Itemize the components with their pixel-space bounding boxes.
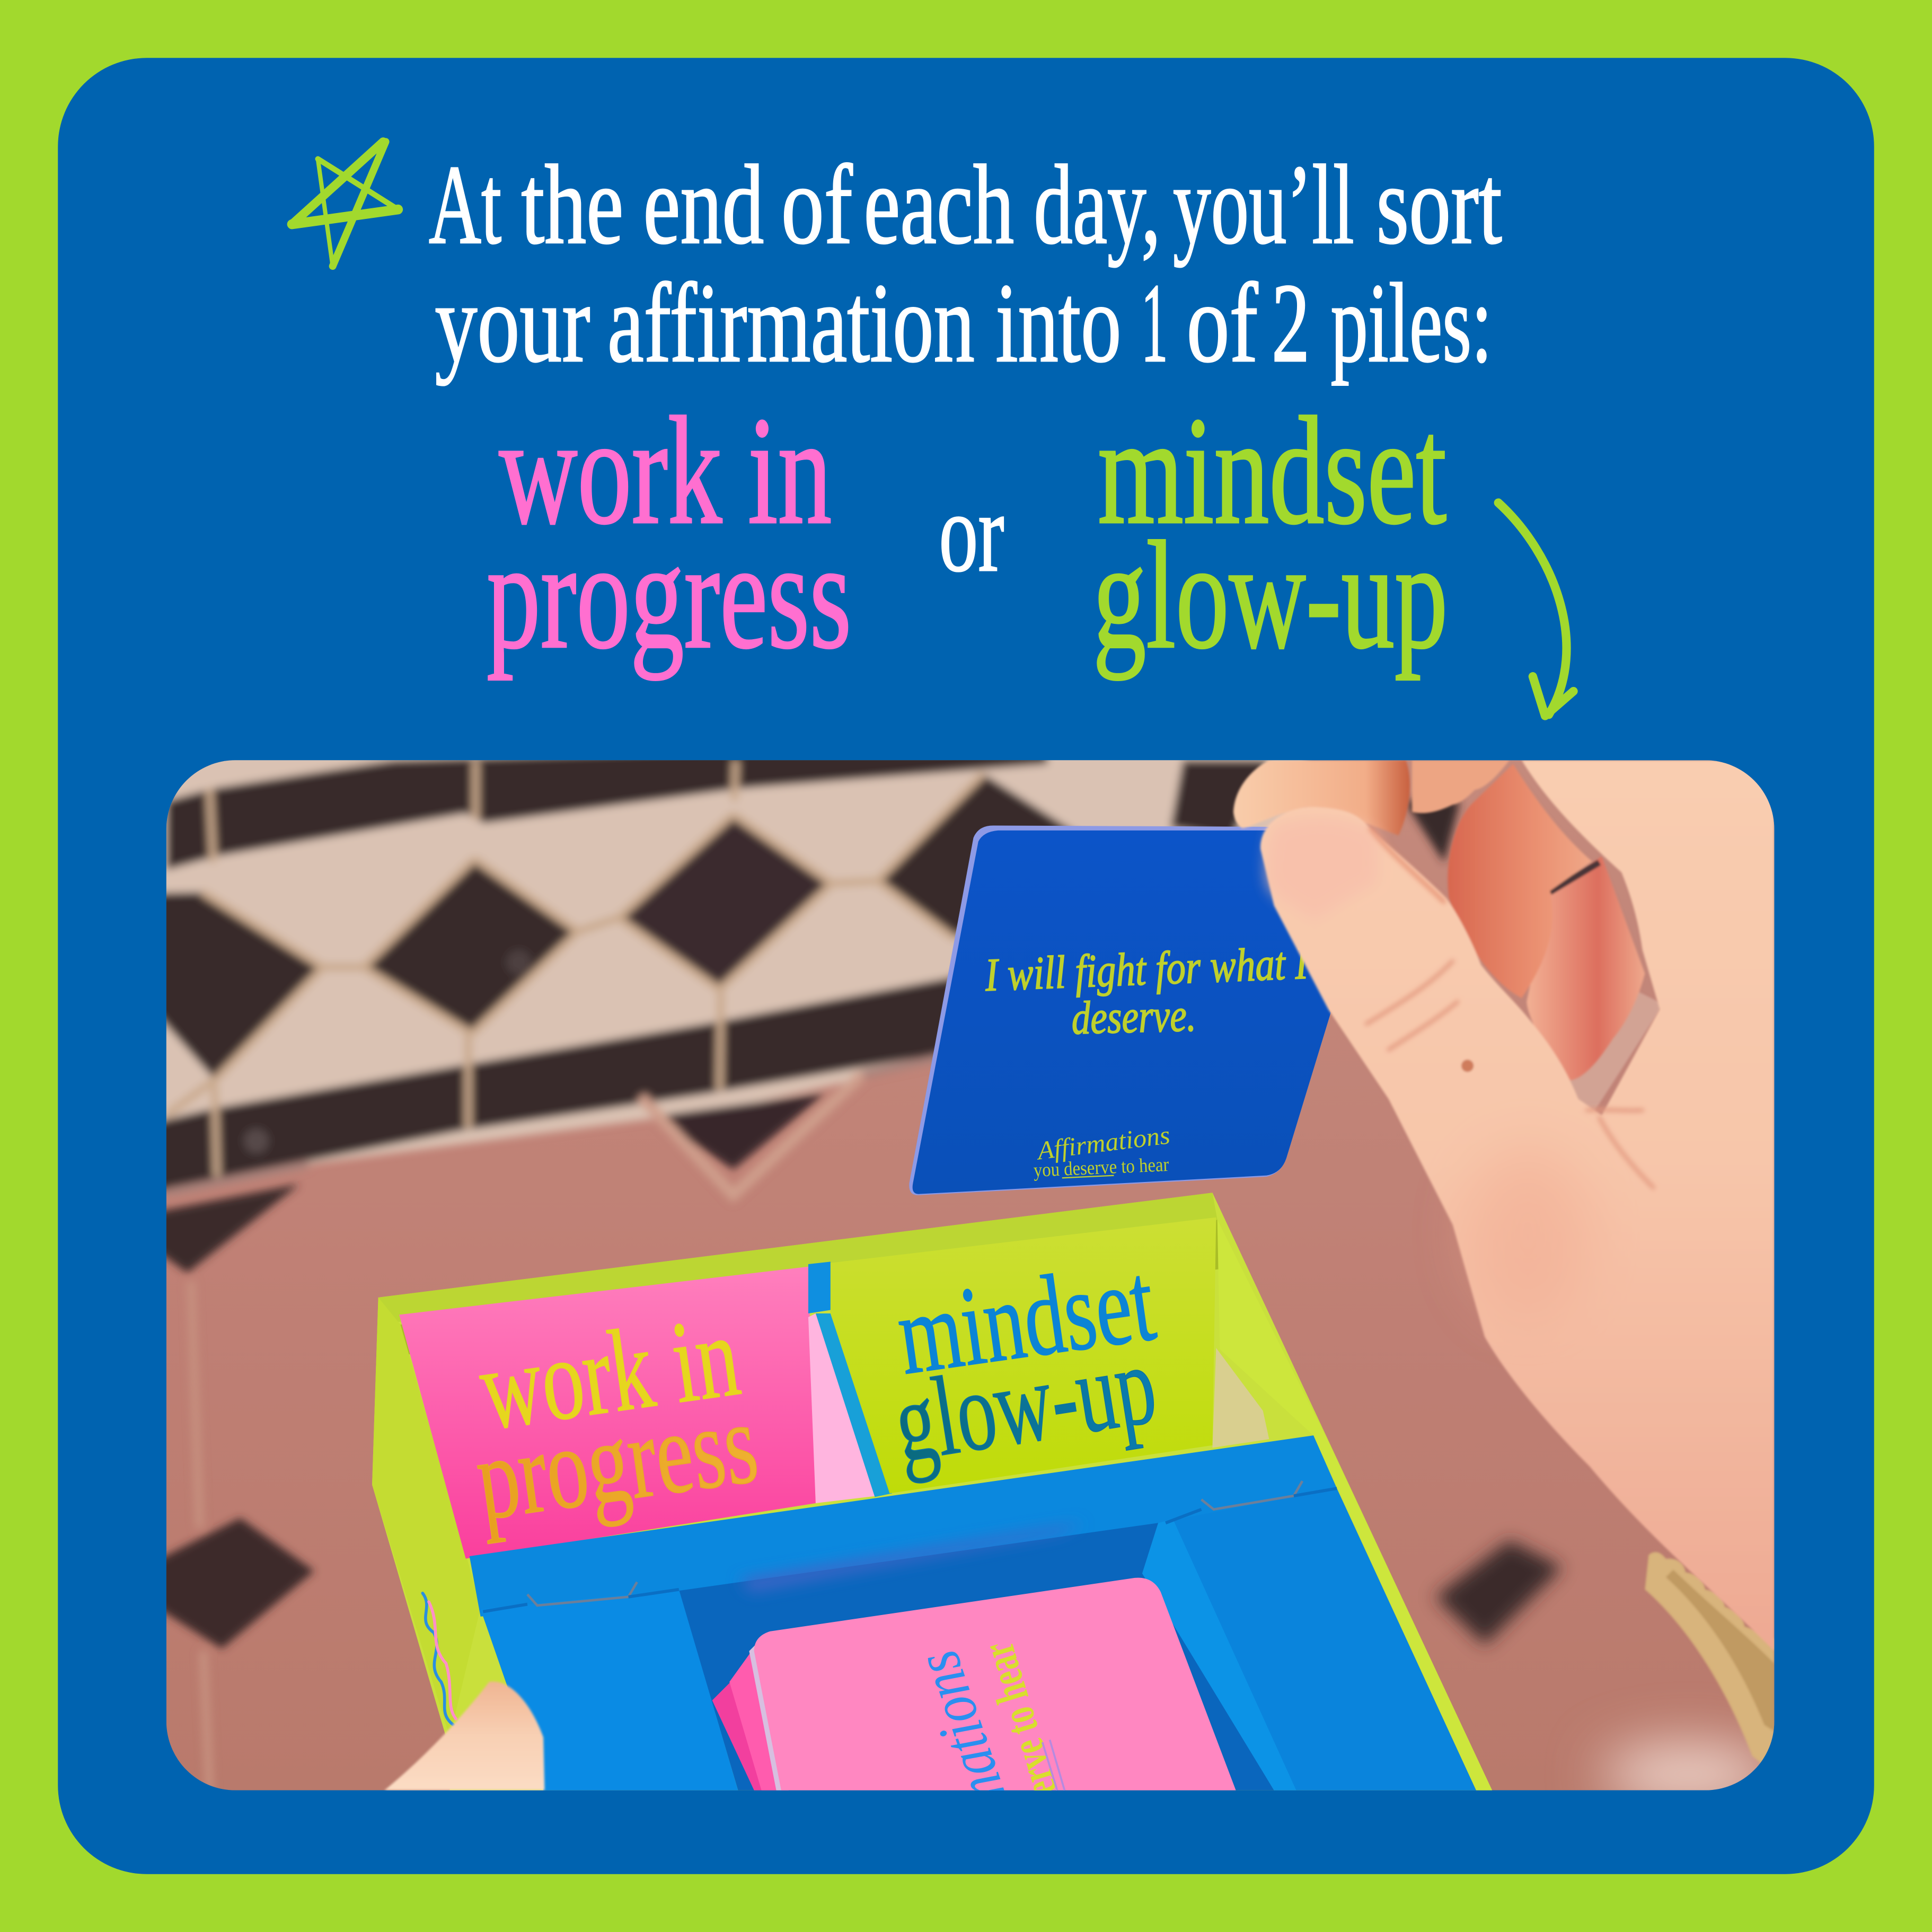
card logo text: Affirmations — [901, 1643, 1056, 1919]
middle finger — [1448, 764, 1592, 998]
reflected purple light — [739, 1523, 1084, 1592]
photo: hand sorting cards into box — [166, 760, 1775, 1790]
blue tab — [808, 1261, 832, 1313]
icon: hand-drawn star — [292, 142, 398, 266]
mole — [1461, 1060, 1474, 1072]
heading: the — [521, 142, 623, 268]
ring finger — [1527, 857, 1645, 1081]
card text: work in progress: progress — [469, 1377, 765, 1545]
label: mindset glow-up: mindset — [1098, 385, 1447, 556]
card logo: you deserve to hear — [1033, 1154, 1170, 1181]
label: mindset glow-up: glow-up — [1093, 509, 1448, 681]
blue inner tray back flap — [470, 1435, 1337, 1617]
card text: mindset glow-up: mindset — [890, 1239, 1162, 1398]
heading: of — [781, 142, 853, 268]
label: work in progress — [487, 385, 851, 681]
box outer lime shell — [372, 1193, 1492, 1790]
lower card stack — [712, 1666, 789, 1790]
bracelet — [1645, 1552, 1774, 1774]
card logo: Affirmations — [1034, 1121, 1171, 1166]
bottom-left thumb — [384, 1681, 544, 1790]
card face — [913, 831, 1331, 1194]
blue right wall — [1142, 1488, 1476, 1790]
card text: mindset glow-up — [886, 1239, 1164, 1486]
second finger top — [1412, 760, 1510, 813]
top card stack edge — [749, 1634, 789, 1790]
card text — [984, 937, 1310, 1044]
hand — [1233, 760, 1774, 1651]
box inner back wall — [399, 1220, 1220, 1355]
pale pink pocket — [808, 1313, 877, 1503]
beige inner — [1212, 1348, 1269, 1448]
box — [372, 1193, 1492, 1919]
heading: your — [435, 260, 590, 386]
card text: mindset glow-up: glow-up — [886, 1321, 1164, 1486]
heading: each — [864, 142, 1014, 268]
card text: deserve. — [1071, 989, 1197, 1044]
blue diagonal edge — [816, 1313, 892, 1497]
palm flush — [1466, 1146, 1590, 1318]
heading: affirmation — [607, 260, 975, 386]
label: mindset glow-up — [1093, 385, 1448, 681]
heading: into — [995, 260, 1121, 386]
heading: end — [643, 142, 764, 268]
card logo text: erve to hear — [972, 1636, 1068, 1802]
label: work in progress: progress — [487, 509, 851, 681]
heading: At — [429, 142, 501, 268]
card logo — [1033, 1121, 1171, 1181]
index finger — [1233, 760, 1410, 835]
label: work in progress: in — [748, 385, 832, 556]
heading: 1 — [1141, 260, 1168, 386]
floating blue affirmation card — [909, 825, 1331, 1195]
tile pattern — [148, 739, 1563, 1790]
card edge — [909, 825, 1331, 1195]
arrow — [1498, 502, 1574, 716]
dark gap stem — [1550, 862, 1599, 892]
card text: I will fight for what I — [984, 937, 1310, 1001]
card text: work in progress: work in — [472, 1290, 746, 1454]
top pink card with logo — [754, 1578, 1236, 1790]
heading: you’ll — [1173, 142, 1354, 268]
lime divider card — [831, 1218, 1216, 1493]
pale floor highlight — [1602, 1745, 1774, 1804]
heading: piles: — [1331, 260, 1492, 386]
blue left block — [481, 1590, 738, 1790]
box right inner wall — [1218, 1220, 1492, 1790]
wall — [166, 760, 1774, 1790]
blue tray interior — [679, 1523, 1274, 1790]
label: or: or — [939, 470, 1004, 595]
pale gap between fingers and palm — [1559, 973, 1663, 1115]
card text: work in progress — [469, 1290, 765, 1545]
heading: day, — [1034, 142, 1161, 268]
thumb and palm — [1260, 760, 1774, 1651]
heading: of — [1187, 260, 1258, 386]
heading — [429, 142, 1502, 386]
knuckle creases — [1366, 828, 1654, 1188]
side logo squiggles — [422, 1593, 456, 1725]
crimped tray corners and seams — [483, 1481, 1337, 1612]
pink divider card — [399, 1267, 816, 1559]
heading: sort — [1377, 142, 1502, 268]
box left inner side — [372, 1298, 481, 1737]
label: work in progress: work — [499, 385, 722, 556]
thumb nail — [1267, 817, 1378, 920]
heading: 2 — [1272, 260, 1310, 386]
